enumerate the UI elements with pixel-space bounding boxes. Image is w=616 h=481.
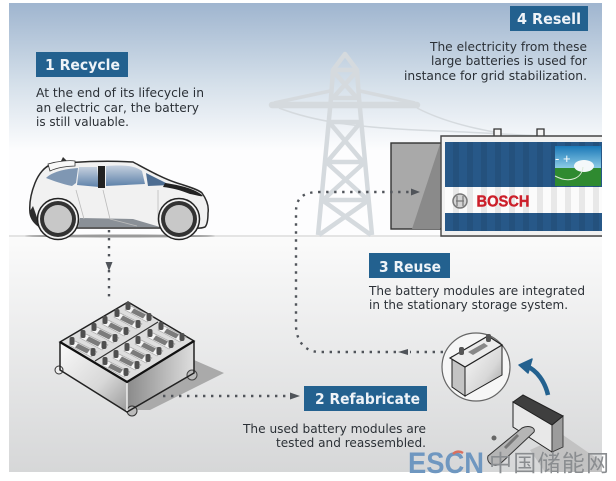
arrow: curved blue arrow [519, 359, 548, 395]
heading: 3 Reuse: 3 Reuse [379, 258, 441, 276]
heading: 2 Refabricate [304, 386, 427, 411]
text: recycle description: is still valuable. [36, 115, 129, 129]
heading: 1 Recycle [36, 52, 128, 77]
stationary storage container [391, 129, 602, 236]
heading: 1 Recycle: 1 Recycle [45, 56, 120, 74]
blue lower band [445, 213, 602, 231]
text: resell description: large batteries is used for [431, 54, 587, 68]
text: refabricate description [242, 422, 426, 450]
heading: 4 Resell [510, 6, 588, 31]
icon: battery pack [55, 302, 224, 416]
text: resell description: instance for grid stabilization. [404, 69, 587, 83]
icon: power pylon [272, 54, 540, 235]
text: refabricate description: tested and reassembled. [276, 436, 426, 450]
text: reuse description: in the stationary storage system. [369, 298, 568, 312]
arrow: car to battery pack [106, 230, 112, 301]
icon: electric car [25, 157, 215, 240]
watermark: ESCN: 中国储能网 [489, 450, 609, 476]
solar landscape picture: - + [555, 151, 571, 166]
solar landscape picture [555, 146, 601, 186]
heading: 4 Resell: 4 Resell [517, 10, 581, 28]
arrow: module to storage system [296, 188, 443, 355]
white middle band [445, 187, 602, 213]
text: reuse description: The battery modules are integrated [368, 284, 585, 298]
heading: 3 Reuse [369, 253, 450, 278]
watermark: ESCN: ESCN [408, 447, 484, 480]
text: refabricate description: The used battery modules are [242, 422, 426, 436]
icon: single battery module in circle [442, 333, 510, 401]
text: reuse description [368, 284, 585, 312]
text: resell description: The electricity from these [429, 40, 587, 54]
watermark: ESCN [405, 447, 610, 480]
Bosch logo [453, 194, 530, 210]
blue upper band [445, 142, 602, 187]
Bosch logo: BOSCH [476, 194, 530, 210]
arrow: battery pack to refabricate [163, 392, 300, 400]
text: recycle description: At the end of its lifecycle in [36, 86, 204, 100]
heading: 2 Refabricate: 2 Refabricate [315, 390, 420, 408]
text: recycle description [36, 86, 204, 129]
icon: removed module [488, 395, 602, 472]
container ribs [453, 142, 599, 231]
text: recycle description: an electric car, the battery [36, 101, 199, 115]
text: resell description [404, 40, 587, 83]
